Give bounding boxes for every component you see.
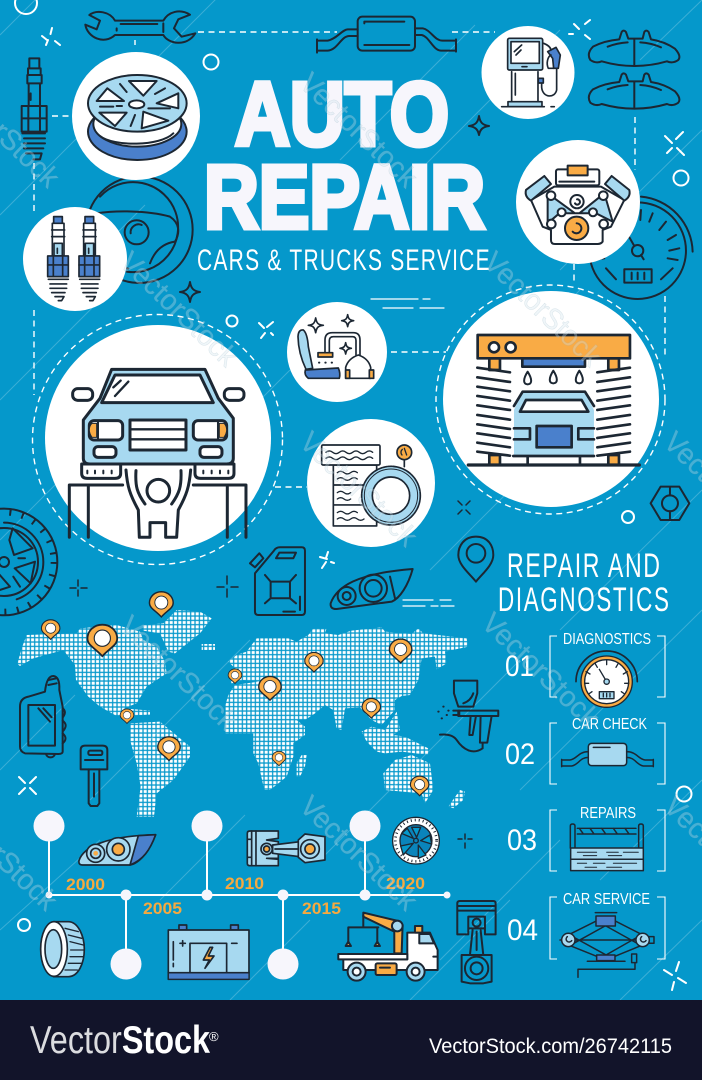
- timeline years: 2005: [143, 899, 182, 918]
- dashed connectors: [32, 32, 665, 564]
- icon: speedometer: [589, 197, 693, 299]
- timeline years: [66, 874, 425, 918]
- icon: muffler: [317, 17, 456, 53]
- icon: headlight outline: [331, 569, 413, 609]
- heading: repair and diagnostics: REPAIR AND: [507, 548, 660, 585]
- timeline years: 2010: [225, 874, 264, 893]
- icon: tire: [41, 922, 84, 977]
- title: auto: AUTO: [235, 65, 449, 165]
- timeline years: 2000: [66, 875, 105, 894]
- decorative dashes: [371, 299, 454, 606]
- watermarks: VectorStock: [293, 67, 424, 195]
- icon: sparkle stars: [180, 116, 489, 302]
- panel: spark plugs: [23, 207, 127, 311]
- icon: location pin outline: [458, 537, 493, 582]
- step 04: CAR SERVICE: [563, 891, 650, 908]
- list: repair steps: [505, 631, 665, 977]
- step 02: [505, 716, 653, 771]
- footer logo: VectorStock: [30, 1019, 210, 1062]
- step 02: 02: [505, 738, 535, 771]
- step 02: CAR CHECK: [572, 716, 647, 733]
- dashed ring: car wash: [436, 285, 665, 514]
- footer: [0, 1000, 702, 1080]
- step 03: REPAIRS: [580, 805, 636, 822]
- watermarks: VectorStock: [477, 246, 608, 374]
- icon: car alarm remote: [20, 676, 66, 757]
- watermarks: VectorStock: [475, 607, 606, 735]
- panel: engine: [516, 140, 640, 264]
- icon: tow truck: [338, 913, 438, 981]
- map pins: [41, 592, 429, 796]
- watermarks: VectorStock: [113, 610, 244, 738]
- timeline years: 2015: [302, 899, 341, 918]
- dashed ring: car lift: [32, 314, 282, 564]
- step 04: [507, 891, 654, 977]
- icon: jerrycan: [250, 547, 305, 615]
- registered mark: ®: [209, 1029, 219, 1044]
- panel: tire documents: [307, 419, 435, 547]
- icon: piston horizontal: [247, 831, 325, 866]
- icon: spray gun: [438, 681, 498, 751]
- step 04: 04: [507, 914, 538, 947]
- watermarks: [0, 67, 702, 918]
- panel: car wash: [443, 291, 659, 507]
- title: repair: REPAIR: [204, 148, 485, 248]
- icon: wrench: [85, 11, 195, 43]
- timeline: [34, 810, 450, 980]
- icon: car key: [81, 746, 107, 806]
- panel: fuel pump: [482, 26, 574, 119]
- watermarks: VectorStock: [113, 246, 244, 374]
- panel: car on lift: [45, 325, 271, 551]
- step 01: [505, 631, 651, 707]
- watermarks: VectorStock: [293, 426, 424, 554]
- icon: piston vertical: [457, 901, 496, 983]
- icon: wheel: [393, 817, 439, 864]
- subtitle: CARS & TRUCKS SERVICE: [197, 245, 490, 277]
- icon: steering wheel: [86, 176, 193, 283]
- chart: world dot map: [17, 592, 468, 817]
- heading: repair and diagnostics: DIAGNOSTICS: [498, 581, 669, 619]
- panel: wheel rim: [72, 52, 200, 180]
- footer url: VectorStock.com/26742115: [429, 1035, 672, 1058]
- step 03: [507, 805, 643, 871]
- timeline years: 2020: [386, 874, 425, 893]
- icon: battery: [168, 925, 249, 979]
- icon: spark plug outline: [22, 58, 47, 159]
- step 01: 01: [505, 650, 534, 683]
- watermarks: VectorStock: [293, 790, 424, 918]
- step 03: 03: [507, 824, 537, 857]
- panel: seat cleaning: [287, 302, 387, 402]
- icon: hex nut: [651, 487, 689, 520]
- icon: headlight colored: [79, 835, 156, 865]
- icon: partial tire: [0, 509, 57, 615]
- step 01: DIAGNOSTICS: [563, 631, 651, 648]
- icon: brake pads: [589, 31, 679, 109]
- heading: repair and diagnostics: [498, 548, 669, 619]
